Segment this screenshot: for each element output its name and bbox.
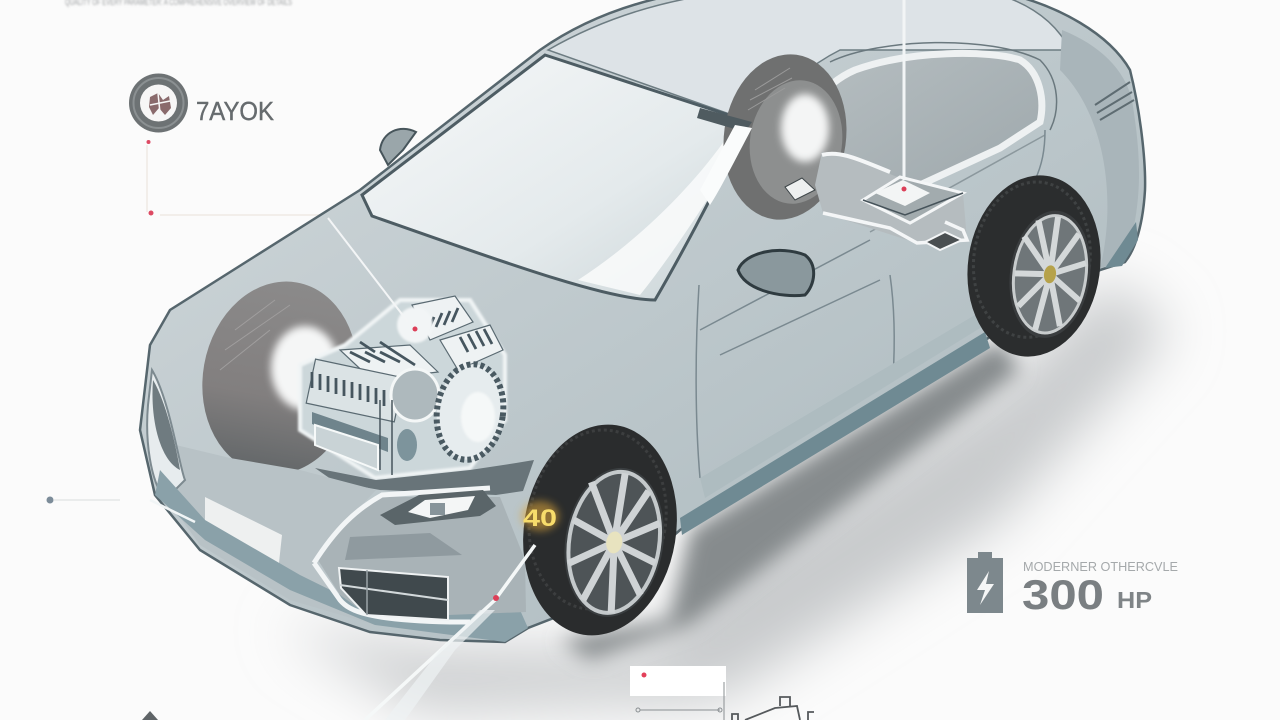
under-engine panel [315, 460, 534, 495]
bumper strip [155, 470, 528, 642]
grille frame [314, 488, 490, 622]
body highlight [700, 312, 985, 498]
front wheel [508, 413, 692, 647]
door mirror [738, 250, 814, 296]
rear axle component [815, 152, 967, 250]
lower window line [870, 135, 1045, 232]
grille panel [318, 497, 526, 618]
beam: front [365, 545, 535, 720]
yellow glow badge: 40 [523, 505, 557, 532]
bottom icon: engine part [732, 697, 814, 720]
stat value: 300 [1022, 571, 1104, 618]
beam: rear [902, 0, 906, 180]
grille [339, 568, 448, 620]
upper grille bar [345, 533, 462, 560]
far mirror [380, 129, 416, 165]
engine [300, 218, 509, 478]
phantom front wheel [187, 269, 373, 487]
door lines [696, 130, 1045, 478]
ground shadow [280, 280, 1170, 710]
stat unit: HP [1117, 587, 1152, 613]
phantom far rear wheel [713, 46, 857, 228]
bottom triangle marker [142, 711, 158, 720]
car body [140, 0, 1145, 642]
badge label: 7AYOK [196, 96, 275, 126]
windshield reflection [578, 125, 752, 295]
left headlight [147, 370, 185, 500]
windshield bar over wheel [697, 108, 752, 132]
side window [790, 53, 1042, 215]
licence plate [205, 497, 282, 572]
rear end [1060, 30, 1139, 268]
fascia [155, 440, 376, 625]
beam: left marker [150, 500, 195, 522]
windshield [362, 55, 750, 300]
car [140, 0, 1145, 720]
icon: tyre badge [129, 74, 188, 132]
tail light [1095, 82, 1134, 120]
window frame [830, 43, 1057, 130]
rear valance [1105, 222, 1138, 268]
stat label: MODERNER OTHERCVLE [1023, 560, 1178, 574]
icon: battery [967, 552, 1003, 613]
bottom callout [630, 666, 726, 720]
yellow glow badge [521, 501, 559, 532]
stat: horsepower [967, 552, 1178, 618]
side sill [680, 332, 990, 535]
left marker line [46, 496, 120, 504]
roof [548, 0, 1070, 122]
rear wheel [956, 167, 1112, 365]
callout: tyre leader [146, 140, 330, 220]
front headlight [380, 490, 496, 525]
